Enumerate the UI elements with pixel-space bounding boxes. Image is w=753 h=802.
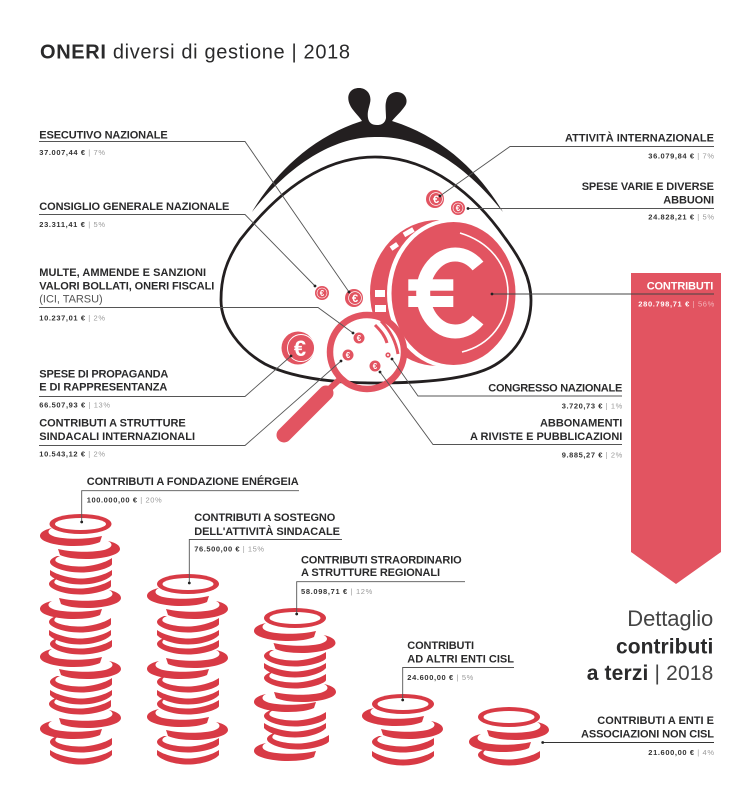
- label: congresso: [488, 383, 623, 410]
- label: consiglio generale: CONSIGLIO GENERALE NAZIONALE: [39, 201, 229, 213]
- leader: esecutivo: [39, 142, 350, 293]
- label: straordinario: [301, 554, 462, 596]
- label: multe: (ICI, TARSU): [39, 293, 103, 305]
- label: strutture sindacali: SINDACALI INTERNAZIONALI: [39, 431, 195, 443]
- label: attivita internazionale: [565, 132, 714, 160]
- label: consiglio generale: [39, 201, 229, 229]
- label: sostegno: [194, 512, 340, 554]
- panel: contributi arrow: 280.798,71 € | 56%: [638, 300, 715, 309]
- label: spese varie: [582, 181, 714, 221]
- icon: purse clasp: [252, 88, 503, 212]
- label: multe: VALORI BOLLATI, ONERI FISCALI: [39, 280, 214, 292]
- leader: fondazione: [80, 491, 299, 523]
- label: multe: 10.237,01 € | 2%: [39, 314, 105, 323]
- leader: multe: [39, 308, 354, 334]
- label: propaganda: E DI RAPPRESENTANZA: [39, 382, 167, 394]
- leader: contributi: [491, 293, 714, 295]
- icon: big euro coin: [370, 218, 517, 368]
- label: fondazione energeia: [87, 475, 299, 505]
- label: sostegno: DELL'ATTIVITÀ SINDACALE: [194, 525, 340, 538]
- icon: coin spese varie: €: [456, 204, 461, 213]
- label: spese varie: 24.828,21 € | 5%: [648, 212, 714, 221]
- leader: congresso: [391, 358, 622, 396]
- label: congresso: 3.720,73 € | 1%: [562, 401, 623, 410]
- icon: coin attivita internazionale: €: [433, 194, 439, 206]
- icon: coin propaganda: €: [294, 336, 306, 361]
- leader: attivita internazionale: [439, 146, 714, 197]
- label: attivita internazionale: ATTIVITÀ INTERNAZIONALE: [565, 132, 714, 145]
- label: strutture sindacali: 10.543,12 € | 2%: [39, 450, 105, 459]
- label: attivita internazionale: 36.079,84 € | 7%: [648, 151, 714, 160]
- icon: coin esecutivo: €: [352, 293, 358, 305]
- label: straordinario: A STRUTTURE REGIONALI: [301, 567, 440, 579]
- label: abbonamenti: 9.885,27 € | 2%: [562, 451, 623, 460]
- label: enti non cisl: CONTRIBUTI A ENTI E: [597, 715, 714, 727]
- heading: dettaglio contributi: contributi: [616, 635, 713, 658]
- label: enti non cisl: 21.600,00 € | 4%: [648, 748, 714, 757]
- leader: altri enti: [401, 668, 514, 701]
- label: abbonamenti: [470, 418, 623, 460]
- leader: spese varie: [467, 207, 714, 210]
- label: multe: MULTE, AMMENDE E SANZIONI: [39, 267, 206, 279]
- heading: dettaglio contributi: [587, 606, 713, 685]
- leader: enti non cisl: [541, 741, 714, 744]
- coin stack: enti non cisl: [469, 707, 549, 766]
- icon: coin consiglio: €: [320, 289, 325, 298]
- label: spese varie: ABBUONI: [663, 194, 714, 206]
- icon: coin consiglio: [315, 286, 329, 300]
- label: altri enti: CONTRIBUTI: [407, 640, 474, 652]
- label: propaganda: SPESE DI PROPAGANDA: [39, 368, 168, 380]
- label: straordinario: CONTRIBUTI STRAORDINARIO: [301, 554, 462, 566]
- panel: contributi arrow: CONTRIBUTI: [647, 280, 713, 292]
- icon: magnifying glass lens: [330, 315, 404, 389]
- heading: dettaglio contributi: Dettaglio: [627, 606, 713, 631]
- title: ONERI diversi di gestione | 2018: [40, 42, 350, 64]
- panel: contributi arrow: [631, 273, 721, 584]
- leader: straordinario: [295, 582, 465, 615]
- label: altri enti: [407, 640, 514, 682]
- label: strutture sindacali: [39, 418, 195, 459]
- icon: coin multe: [354, 332, 364, 344]
- label: altri enti: AD ALTRI ENTI CISL: [407, 653, 514, 665]
- icon: coin abbonamenti: [370, 360, 380, 372]
- leader: consiglio: [39, 214, 316, 287]
- leader: strutture internazionali: [39, 360, 342, 446]
- label: enti non cisl: [581, 715, 714, 757]
- leader: sostegno: [188, 540, 342, 584]
- label: straordinario: 58.098,71 € | 12%: [301, 587, 373, 596]
- icon: coin spese varie: [451, 201, 465, 215]
- heading: dettaglio contributi: a terzi | 2018: [587, 662, 713, 685]
- icon: coin esecutivo: [345, 289, 363, 307]
- icon: purse body outline: [221, 157, 531, 383]
- label: multe: [39, 267, 214, 323]
- label: esecutivo nazionale: [39, 129, 168, 157]
- label: consiglio generale: 23.311,41 € | 5%: [39, 220, 105, 229]
- label: enti non cisl: ASSOCIAZIONI NON CISL: [581, 729, 714, 741]
- label: fondazione energeia: CONTRIBUTI A FONDAZIONE ENÉRGEIA: [87, 475, 299, 488]
- label: sostegno: CONTRIBUTI A SOSTEGNO: [194, 512, 336, 524]
- icon: coin strutture internazionali: €: [346, 351, 351, 360]
- label: abbonamenti: A RIVISTE E PUBBLICAZIONI: [470, 431, 622, 443]
- label: sostegno: 76.500,00 € | 15%: [194, 545, 264, 554]
- leader: propaganda: [39, 355, 292, 396]
- icon: coin attivita internazionale: [426, 190, 444, 208]
- label: congresso: CONGRESSO NAZIONALE: [488, 383, 622, 395]
- leader: abbonamenti: [379, 371, 622, 444]
- label: altri enti: 24.600,00 € | 5%: [407, 673, 474, 682]
- icon: coin strutture internazionali: [342, 350, 354, 360]
- icon: coin propaganda: [282, 332, 314, 364]
- label: fondazione energeia: 100.000,00 € | 20%: [87, 496, 162, 505]
- coin stack: straordinario strutture regionali: [254, 608, 336, 761]
- coin stack: altri enti cisl: [362, 694, 443, 766]
- label: propaganda: [39, 368, 168, 410]
- coin stack: fondazione energeia: [40, 514, 121, 764]
- coin stack: sostegno attivita sindacale: [147, 574, 228, 764]
- icon: coin congresso: [385, 352, 391, 358]
- label: esecutivo nazionale: ESECUTIVO NAZIONALE: [39, 129, 168, 141]
- icon: coin abbonamenti: €: [373, 362, 378, 371]
- label: spese varie: SPESE VARIE E DIVERSE: [582, 181, 714, 193]
- label: propaganda: 66.507,93 € | 13%: [39, 401, 110, 410]
- icon: coin multe: €: [357, 334, 362, 343]
- label: esecutivo nazionale: 37.007,44 € | 7%: [39, 148, 105, 157]
- icon: magnifying glass: [284, 315, 404, 435]
- label: abbonamenti: ABBONAMENTI: [540, 418, 622, 430]
- label: strutture sindacali: CONTRIBUTI A STRUTTURE: [39, 418, 186, 430]
